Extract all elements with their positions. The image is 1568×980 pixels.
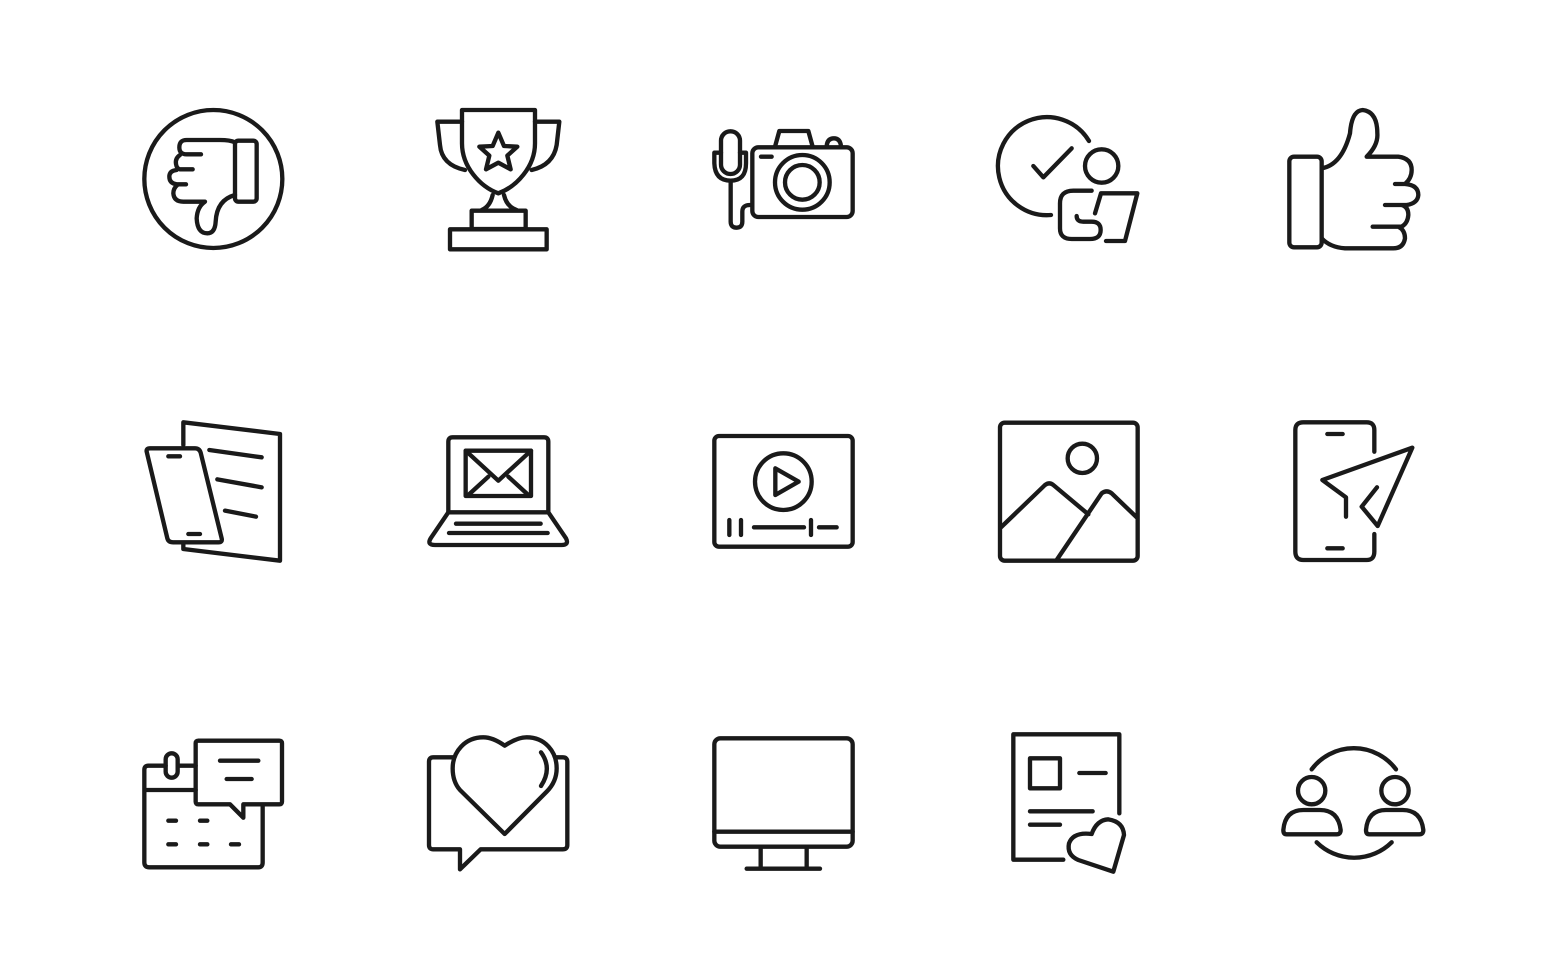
icon: landscape image <box>1000 423 1138 561</box>
icon: approved check with person at laptop <box>998 117 1137 241</box>
icon: profile document with heart <box>1013 734 1124 872</box>
icon: laptop with envelope <box>429 437 567 545</box>
icon: desktop monitor <box>714 738 853 869</box>
icon: phone and document <box>147 422 280 561</box>
icon: thumbs down in circle <box>144 110 282 248</box>
icon: heart speech bubble <box>429 737 567 869</box>
icon: video player <box>714 436 853 547</box>
icon: two people connected <box>1283 748 1423 858</box>
icon: phone with paper plane <box>1295 422 1412 560</box>
icon: calendar with chat bubble <box>144 741 282 867</box>
icon: thumbs up <box>1289 110 1418 248</box>
icon: camera with microphone <box>714 131 853 228</box>
icon: trophy with star <box>437 110 559 249</box>
